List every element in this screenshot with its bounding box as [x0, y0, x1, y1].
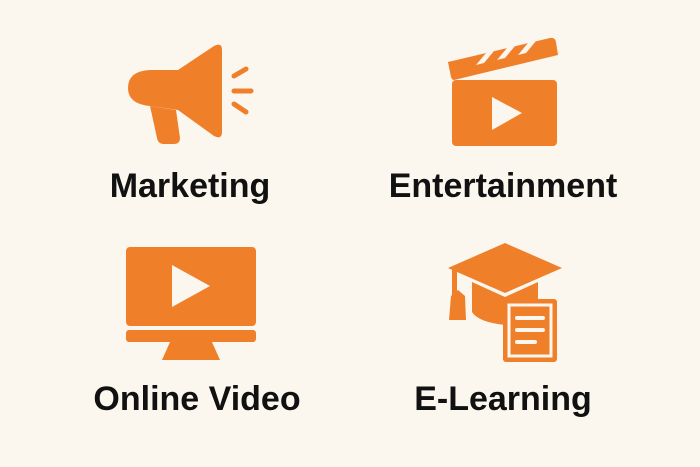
icon: megaphone: [128, 45, 251, 144]
icon: graduation cap with document: [448, 243, 562, 362]
label: Entertainment: Entertainment: [389, 167, 617, 205]
label: Marketing: Marketing: [110, 167, 270, 205]
label: E-Learning: E-Learning: [414, 380, 592, 418]
label: Online Video: Online Video: [93, 380, 301, 418]
icon: clapperboard: [448, 38, 558, 146]
icon: monitor: [126, 247, 256, 360]
